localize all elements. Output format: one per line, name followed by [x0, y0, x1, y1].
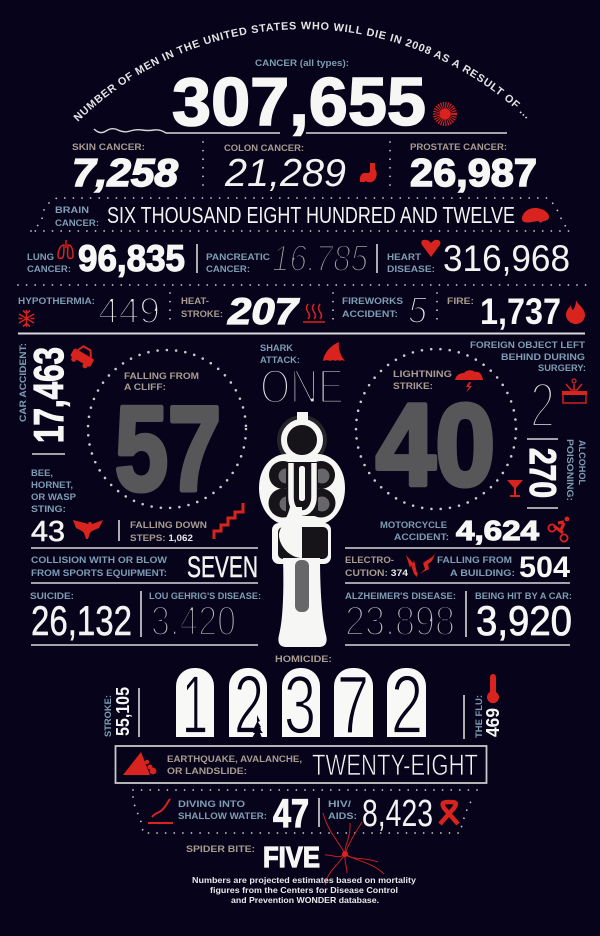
- panel: alzheimer's, hit by a car: [345, 591, 572, 644]
- panel: stroke: 55,105: [113, 687, 133, 736]
- panel: bee, hornet, wasp: OR WASP: [31, 492, 77, 503]
- panel: diving and hiv: [148, 792, 458, 836]
- footnote: [192, 875, 416, 905]
- panel: bee, hornet, wasp: 43: [31, 516, 65, 548]
- panel: hypothermia, heat-stroke, fireworks, fire: 207: [227, 291, 301, 332]
- icon: storm cloud: [455, 370, 483, 393]
- panel: lung, pancreatic, heart: CANCER:: [27, 264, 71, 275]
- panel: foreign object: 2: [530, 369, 555, 441]
- panel: lightning strike: STRIKE:: [393, 381, 433, 392]
- panel: diving and hiv: DIVING INTO: [178, 799, 245, 810]
- wavy underline: [94, 129, 507, 133]
- panel: sports equipment: COLLISION WITH OR BLOW: [31, 555, 167, 566]
- panel: homicide counter: HOMICIDE:: [275, 654, 332, 665]
- panel: homicide counter: 2: [391, 658, 423, 751]
- panel: skin, colon, prostate cancer: COLON CANCER:: [224, 143, 304, 154]
- panel: lung, pancreatic, heart: HEART: [387, 252, 421, 263]
- panel: lung, pancreatic, heart: 316,968: [443, 238, 570, 279]
- icon: ribbon: [440, 802, 458, 824]
- panel: foreign object: SURGERY:: [538, 363, 586, 374]
- panel: stroke: STROKE:: [103, 695, 114, 737]
- panel: lung, pancreatic, heart: 96,835: [78, 238, 185, 279]
- icon: lungs: [58, 240, 73, 258]
- panel: falling down steps: STEPS: 1,062: [130, 533, 193, 544]
- panel: shark attack: [260, 342, 345, 414]
- panel: motorcycle: MOTORCYCLE: [380, 520, 447, 531]
- icon: thermometer: [487, 674, 499, 703]
- icon: heart: [421, 240, 440, 257]
- panel: alzheimer's, hit by a car: ALZHEIMER'S DISEASE:: [345, 591, 456, 602]
- panel: hypothermia, heat-stroke, fireworks, fire: HEAT-: [181, 296, 209, 307]
- panel: cancer all types: [172, 58, 454, 140]
- title: curved heading: NUMBER OF MEN IN THE UNITED STATES WHO WILL DIE IN 2008 AS A RESULT OF ...: [73, 22, 528, 122]
- panel: the flu: 469: [483, 708, 503, 737]
- panel: electrocution and falling from a building: 504: [519, 551, 570, 584]
- panel: falling from a cliff: [88, 350, 246, 516]
- panel: brain cancer: CANCER:: [55, 218, 99, 229]
- icon: bee: [73, 520, 103, 539]
- panel: sports equipment: SEVEN: [187, 551, 258, 584]
- panel: car accident: 17,463: [25, 347, 72, 443]
- icon: snowflake: [18, 310, 34, 327]
- panel: alcohol poisoning: [507, 439, 587, 508]
- panel: shark attack: SHARK: [260, 343, 293, 354]
- icon: heat waves: [303, 304, 325, 322]
- panel: alzheimer's, hit by a car: BEING HIT BY A CAR:: [475, 591, 572, 602]
- panel: lung, pancreatic, heart: PANCREATIC: [206, 252, 270, 263]
- panel: skin, colon, prostate cancer: PROSTATE CANCER:: [410, 142, 507, 153]
- panel: electrocution and falling from a building: CUTION: 374: [345, 568, 409, 579]
- panel: diving and hiv: HIV/: [328, 799, 351, 810]
- panel: alcohol poisoning: ALCOHOL: [576, 440, 587, 485]
- icon: small tree on digit: [252, 715, 263, 742]
- panel: suicide, lou gehrig: 3,420: [151, 597, 236, 644]
- panel: cancer all types: CANCER (all types):: [255, 58, 349, 69]
- panel: foreign object: [470, 340, 587, 441]
- panel: shark attack: ATTACK:: [260, 355, 300, 366]
- panel: homicide counter: 1: [182, 658, 208, 751]
- panel: homicide counter: 2: [234, 658, 264, 751]
- footnote: figures from the Centers for Disease Control: [210, 885, 398, 895]
- panel: motorcycle: [380, 515, 569, 546]
- panel: electrocution and falling from a building: A BUILDING:: [450, 568, 515, 579]
- panel: spider bite: [186, 813, 384, 885]
- panel: hypothermia, heat-stroke, fireworks, fire: STROKE:: [181, 309, 223, 320]
- panel: spider bite: FIVE: [263, 842, 320, 874]
- panel: homicide counter: [176, 654, 426, 751]
- icon: spider: [323, 813, 384, 885]
- panel: bee, hornet, wasp: HORNET,: [31, 480, 73, 491]
- panel: homicide counter: 7: [337, 658, 369, 751]
- panel: lung, pancreatic, heart: DISEASE:: [387, 264, 435, 275]
- panel: sports equipment: [31, 551, 258, 584]
- panel: diving and hiv: AIDS:: [328, 811, 357, 822]
- panel: skin, colon, prostate cancer: 26,987: [410, 152, 537, 195]
- panel: motorcycle: ACCIDENT:: [394, 532, 449, 543]
- panel: lightning strike: [356, 349, 516, 510]
- panel: hypothermia, heat-stroke, fireworks, fire: FIREWORKS: [342, 296, 403, 307]
- panel: suicide, lou gehrig: LOU GEHRIG'S DISEASE:: [149, 591, 261, 602]
- panel: hypothermia, heat-stroke, fireworks, fire: FIRE:: [447, 296, 474, 307]
- panel: bee, hornet, wasp: STING:: [31, 504, 66, 515]
- panel: hypothermia, heat-stroke, fireworks, fire: 449: [98, 290, 160, 331]
- panel: foreign object: BEHIND DURING: [501, 352, 585, 363]
- icon: shark fin: [323, 342, 345, 361]
- panel: brain cancer: BRAIN: [55, 205, 89, 216]
- panel: alcohol poisoning: POISONING:: [564, 439, 575, 501]
- panel: earthquake box: EARTHQUAKE, AVALANCHE,: [167, 754, 302, 765]
- icon: car: [68, 343, 97, 370]
- panel: skin, colon, prostate cancer: [72, 142, 537, 195]
- icon: motorcycle: [548, 517, 569, 542]
- panel: electrocution and falling from a building: [345, 551, 570, 584]
- panel: homicide counter: 3: [284, 658, 316, 751]
- icon: landslide: [123, 752, 156, 775]
- panel: stroke: [103, 687, 139, 737]
- panel: foreign object: FOREIGN OBJECT LEFT: [470, 340, 585, 351]
- panel: sports equipment: FROM SPORTS EQUIPMENT:: [31, 568, 167, 579]
- panel: alcohol poisoning: 270: [522, 448, 563, 498]
- panel: lung, pancreatic, heart: [27, 238, 570, 279]
- panel: diving and hiv: 47: [273, 792, 309, 836]
- panel: earthquake box: OR LANDSLIDE:: [167, 766, 247, 777]
- panel: bee, hornet, wasp: BEE,: [31, 468, 53, 479]
- panel: falling down steps: [130, 503, 243, 544]
- icon: brain: [522, 208, 549, 223]
- panel: bee, hornet, wasp: [31, 468, 103, 548]
- panel: lung, pancreatic, heart: 16,785: [272, 238, 368, 279]
- panel: lightning strike: LIGHTNING: [393, 369, 452, 380]
- panel: falling from a cliff: A CLIFF:: [124, 382, 166, 393]
- panel: the flu: [464, 674, 503, 739]
- footnote: Numbers are projected estimates based on mortality: [192, 875, 416, 885]
- panel: the flu: THE FLU:: [474, 695, 485, 738]
- icon: flame: [566, 300, 585, 324]
- panel: suicide, lou gehrig: 26,132: [31, 597, 132, 644]
- panel: falling from a cliff: 57: [115, 382, 221, 516]
- panel: hypothermia, heat-stroke, fireworks, fire: 5: [408, 290, 427, 331]
- panel: suicide, lou gehrig: [30, 591, 261, 644]
- panel: earthquake box: [116, 746, 486, 783]
- panel: car accident: CAR ACCIDENT:: [18, 343, 29, 422]
- panel: skin, colon, prostate cancer: 7,258: [72, 152, 178, 195]
- icon: diving: [148, 799, 173, 823]
- panel: electrocution and falling from a building: FALLING FROM: [437, 555, 512, 566]
- number: 307,655: 307,655: [172, 64, 426, 140]
- panel: hypothermia, heat-stroke, fireworks, fire: ACCIDENT:: [342, 309, 398, 320]
- panel: suicide, lou gehrig: SUICIDE:: [30, 591, 74, 602]
- panel: electrocution and falling from a building: ELECTRO-: [345, 555, 394, 566]
- panel: diving and hiv: 8,423: [362, 793, 433, 835]
- icon: revolver: [259, 412, 345, 647]
- panel: hypothermia, heat-stroke, fireworks, fire: 1,737: [480, 291, 561, 332]
- panel: skin, colon, prostate cancer: 21,289: [224, 152, 346, 195]
- panel: earthquake box: TWENTY-EIGHT: [312, 749, 478, 782]
- panel: shark attack: ONE: [260, 361, 344, 414]
- panel: lung, pancreatic, heart: CANCER:: [206, 264, 250, 275]
- icon: cancer burst: [436, 106, 454, 122]
- panel: car accident: [18, 343, 97, 454]
- icon: electrocution: [406, 554, 435, 577]
- panel: falling down steps: FALLING DOWN: [130, 520, 207, 531]
- panel: lung, pancreatic, heart: LUNG: [27, 252, 54, 263]
- icon: surgery: [562, 379, 587, 403]
- panel: motorcycle: 4,624: [456, 515, 539, 546]
- panel: spider bite: SPIDER BITE:: [186, 844, 255, 855]
- panel: alzheimer's, hit by a car: 3,920: [476, 597, 572, 644]
- icon: stairs: [214, 503, 243, 539]
- icon: stomach: [360, 163, 377, 182]
- panel: hypothermia, heat-stroke, fireworks, fire: [18, 290, 585, 332]
- panel: alzheimer's, hit by a car: 23,898: [345, 597, 455, 644]
- icon: martini: [507, 480, 523, 497]
- panel: skin, colon, prostate cancer: SKIN CANCER:: [72, 142, 145, 153]
- panel: diving and hiv: SHALLOW WATER:: [178, 811, 267, 822]
- panel: falling from a cliff: FALLING FROM: [124, 371, 199, 382]
- panel: lightning strike: 40: [376, 380, 495, 510]
- panel: hypothermia, heat-stroke, fireworks, fire: HYPOTHERMIA:: [18, 296, 95, 307]
- footnote: and Prevention WONDER database.: [231, 895, 379, 905]
